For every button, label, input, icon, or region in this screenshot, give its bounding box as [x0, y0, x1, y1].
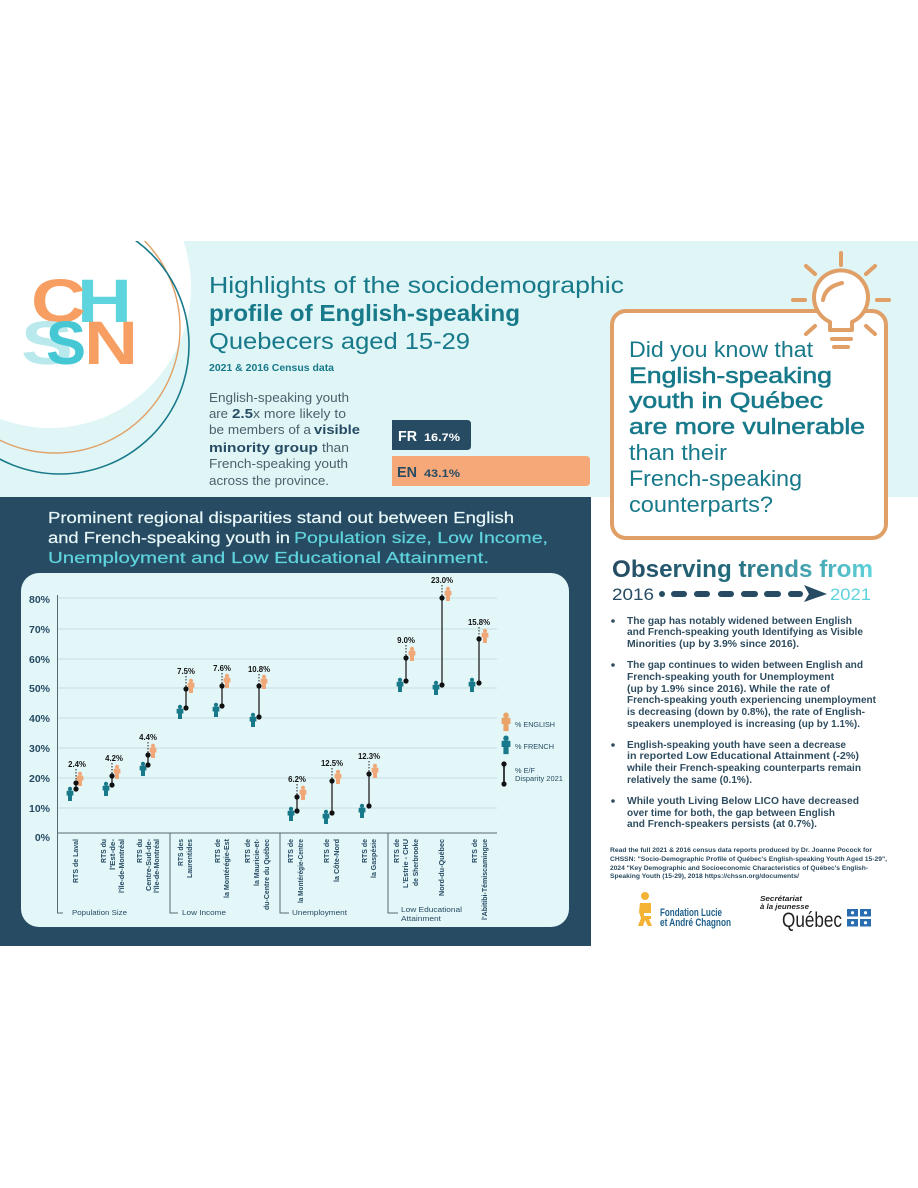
logo: Fondation Lucie et André Chagnon: et André Chagnon	[660, 917, 731, 929]
data: RTS du Centre-Sud-de-l'île-de-Montréal	[135, 733, 161, 893]
data: Nord-du-Québec	[431, 576, 453, 896]
panel heading: Population size, Low Income,	[294, 530, 548, 547]
y axis labels: 20%	[29, 773, 51, 785]
group label: Low Income: Low Income	[182, 908, 226, 917]
bar: EN 43.1%: EN	[397, 465, 417, 481]
y axis labels: 40%	[29, 713, 51, 725]
bar: FR 16.7%: FR	[398, 429, 418, 445]
data: RTS des Laurentides: Laurentides	[185, 839, 194, 878]
legend: % FRENCH	[515, 742, 554, 751]
data: RTS du Centre-Sud-de-l'île-de-Montréal: l'île-de-Montréal	[152, 839, 161, 893]
logo: CHSSN: S	[21, 309, 73, 377]
y axis labels: 50%	[29, 683, 51, 695]
logo: Secrétariat à la jeunesse Québec: à la jeunesse	[760, 902, 809, 911]
chart: disparity dot plot	[21, 573, 569, 927]
y axis labels: 60%	[29, 654, 51, 666]
bullet: unemployment: is decreasing (down by 0.8%), the rate of English-	[627, 707, 865, 718]
group label: Low Educational Attainment: Low Educational	[401, 905, 462, 914]
data: RTS de la Mauricie-et-du-Centre du Québec: RTS de	[243, 839, 252, 863]
bullet: low educational attainment: relatively the same (0.1%).	[627, 775, 752, 786]
title	[209, 272, 624, 354]
heading: observing trends: Observing trends from	[612, 556, 873, 583]
data: RTS des Laurentides: 7.5%	[177, 667, 195, 676]
data: RTS de la Montérégie-Est: RTS de	[213, 839, 222, 863]
header band	[0, 241, 918, 497]
data: RTS de L'Estrie - CHU de Sherbrooke: 9.0%	[397, 636, 415, 645]
y axis labels	[29, 594, 51, 844]
data: RTS de la Mauricie-et-du-Centre du Québec	[243, 665, 271, 910]
callout text: than their	[629, 440, 727, 465]
callout text: youth in Québec	[629, 388, 823, 413]
text block: visible minority: minority group	[209, 441, 318, 455]
data: RTS de l'Abitibi-Témiscamingue: l'Abitibi-Témiscamingue	[480, 839, 489, 920]
bar: EN 43.1%: 43.1%	[424, 468, 460, 480]
bullet: visible minorities	[611, 616, 863, 650]
bullet: low educational attainment: while their French-speaking counterparts remain	[626, 763, 861, 774]
subtitle: census data: 2021 & 2016 Census data	[209, 362, 334, 374]
legend: % E/F	[515, 766, 535, 775]
bullet: visible minorities: The gap has notably widened between English	[627, 616, 852, 627]
bullet: unemployment	[611, 660, 877, 730]
logo: CHSSN	[21, 267, 138, 377]
callout text: Did you know that	[629, 337, 813, 362]
y axis labels: 10%	[29, 803, 51, 815]
y axis labels: 80%	[29, 594, 51, 606]
data: RTS de la Montérégie-Centre: 6.2%	[288, 775, 306, 784]
bullet: unemployment: (up by 1.9% since 2016). While the rate of	[627, 684, 831, 695]
text block: visible minority: are	[209, 407, 228, 421]
data: RTS de la Côte-Nord	[321, 759, 343, 882]
logo: Fondation Lucie et André Chagnon	[638, 892, 731, 929]
callout text	[629, 337, 865, 517]
logo: Fondation Lucie et André Chagnon: Fondation Lucie	[660, 907, 722, 919]
legend: Disparity 2021	[515, 774, 563, 783]
timeline arrow: 2016 to 2021: 2021	[830, 585, 871, 604]
logo: CHSSN: H	[77, 267, 132, 335]
bullet: visible minorities: and French-speaking youth Identifying as Visible	[627, 627, 863, 638]
bullet: living below LICO: While youth Living Below LICO have decreased	[627, 796, 859, 807]
data: RTS du l'Est-de-l'île-de-Montréal: 4.2%	[105, 754, 123, 763]
data: RTS de la Montérégie-Est: la Montérégie-Est	[222, 839, 231, 898]
text block: visible minority: 2.5	[232, 407, 253, 421]
bullet: living below LICO: and French-speakers persists (at 0.7%).	[627, 819, 817, 830]
legend	[501, 713, 563, 787]
footnote: sources: CHSSN: "Socio-Demographic Profile of Québec's English-speaking Youth Aged 15-29",	[610, 856, 887, 863]
callout: did you know	[612, 311, 886, 538]
data: RTS de la Montérégie-Est: 7.6%	[213, 664, 231, 673]
data: RTS des Laurentides	[176, 667, 195, 878]
panel: regional disparities	[0, 497, 591, 946]
data: RTS du l'Est-de-l'île-de-Montréal: l'Est-de-	[108, 838, 117, 870]
legend: % ENGLISH	[515, 720, 555, 729]
text block: visible minority: French-speaking youth	[209, 457, 348, 471]
data: RTS de l'Abitibi-Témiscamingue: 15.8%	[468, 618, 490, 627]
text block: visible minority: across the province.	[209, 474, 329, 488]
data: RTS de la Mauricie-et-du-Centre du Québec: du-Centre du Québec	[262, 839, 271, 910]
text block: visible minority: than	[322, 441, 349, 455]
group label: Population Size: Population Size	[72, 908, 127, 917]
callout text: counterparts?	[629, 492, 773, 517]
infographic page	[0, 241, 918, 946]
data: Nord-du-Québec: 23.0%	[431, 576, 453, 585]
bullet: low educational attainment: in reported Low Educational Attainment (-2%)	[627, 751, 859, 762]
panel heading	[48, 510, 548, 567]
data: RTS des Laurentides: RTS des	[176, 839, 185, 866]
data: RTS du l'Est-de-l'île-de-Montréal	[99, 754, 126, 893]
bullet: unemployment: The gap continues to widen between English and	[627, 660, 863, 671]
text block: visible minority: English-speaking youth	[209, 391, 349, 405]
data: RTS de la Gaspésie: 12.3%	[358, 752, 380, 761]
timeline arrow: 2016 to 2021	[612, 585, 871, 604]
panel heading: and French-speaking youth in	[48, 530, 290, 547]
data: RTS de Laval: RTS de Laval	[71, 839, 80, 883]
data: RTS de l'Abitibi-Témiscamingue: RTS de	[470, 839, 479, 863]
bar: FR 16.7%	[392, 420, 471, 450]
logo: Secrétariat à la jeunesse Québec: Québec	[782, 909, 842, 932]
group label: Low Educational Attainment	[401, 905, 462, 923]
data: RTS du l'Est-de-l'île-de-Montréal: l'île-de-Montréal	[117, 839, 126, 893]
text block: visible minority: x more likely to	[253, 407, 346, 421]
callout text: English-speaking	[629, 363, 832, 388]
text block: visible minority: visible	[314, 423, 360, 437]
data: RTS de la Mauricie-et-du-Centre du Québec: 10.8%	[248, 665, 270, 674]
data: RTS de la Montérégie-Centre	[286, 775, 306, 903]
callout text: French-speaking	[629, 466, 802, 491]
data: RTS du Centre-Sud-de-l'île-de-Montréal: RTS du	[135, 839, 144, 863]
data: RTS de la Côte-Nord: RTS de	[322, 839, 331, 863]
data: RTS du Centre-Sud-de-l'île-de-Montréal: Centre-Sud-de-	[144, 839, 153, 891]
panel heading: Prominent regional disparities stand out between English	[48, 510, 514, 527]
data: RTS du l'Est-de-l'île-de-Montréal: RTS du	[99, 839, 108, 863]
data: RTS de la Montérégie-Centre: RTS de	[286, 839, 295, 863]
data: RTS de la Côte-Nord: 12.5%	[321, 759, 343, 768]
footnote: sources	[610, 847, 887, 880]
data: RTS de la Montérégie-Centre: la Montérégie-Centre	[296, 839, 305, 903]
footnote: sources: Read the full 2021 & 2016 census data reports produced by Dr. Joanne Pocock for	[610, 847, 872, 854]
bar: EN 43.1%	[392, 456, 590, 486]
title: Highlights of the sociodemographic	[209, 272, 624, 298]
data: RTS de la Gaspésie: la Gaspésie	[369, 839, 378, 878]
callout text: are more vulnerable	[629, 414, 865, 439]
bullet: living below LICO: over time for both, the gap between English	[627, 808, 835, 819]
data: RTS de la Gaspésie: RTS de	[360, 839, 369, 863]
timeline arrow: 2016 to 2021: 2016	[612, 585, 654, 604]
data: Nord-du-Québec: Nord-du-Québec	[437, 839, 446, 896]
logo: Secrétariat à la jeunesse Québec	[760, 894, 871, 932]
data: RTS de la Côte-Nord: la Côte-Nord	[332, 839, 341, 882]
data: RTS de L'Estrie - CHU de Sherbrooke: de Sherbrooke	[411, 839, 420, 886]
group label: Low Educational Attainment: Attainment	[401, 914, 442, 923]
data: RTS de la Gaspésie	[358, 752, 380, 878]
data: RTS de l'Abitibi-Témiscamingue	[468, 618, 490, 920]
data: RTS de la Montérégie-Est	[213, 664, 231, 898]
footnote: sources: Speaking Youth (15-29), 2018 https://chssn.org/documents/	[610, 873, 799, 880]
title: profile of English-speaking	[209, 300, 520, 326]
data: RTS de L'Estrie - CHU de Sherbrooke: L'Estrie - CHU	[401, 839, 410, 888]
bullet: unemployment: French-speaking youth for Unemployment	[627, 672, 835, 683]
data: RTS de la Mauricie-et-du-Centre du Québec: la Mauricie-et-	[252, 839, 261, 886]
data: RTS de L'Estrie - CHU de Sherbrooke	[392, 636, 420, 888]
icon: light bulb	[793, 253, 889, 347]
logo: CHSSN: N	[84, 309, 138, 377]
bullet: low educational attainment: English-speaking youth have seen a decrease	[627, 740, 846, 751]
bullet: unemployment: French-speaking youth experiencing unemployment	[627, 695, 877, 706]
logo: CHSSN: S	[46, 309, 86, 377]
y axis labels: 0%	[35, 832, 51, 844]
title: Quebecers aged 15-29	[209, 328, 470, 354]
data: RTS du Centre-Sud-de-l'île-de-Montréal: 4.4%	[139, 733, 157, 742]
bullet: low educational attainment	[611, 740, 861, 786]
data: RTS de Laval	[67, 760, 86, 883]
y axis labels: 70%	[29, 624, 51, 636]
bullet: unemployment: speakers unemployed is increasing (up by 1.1%).	[627, 719, 860, 730]
data: RTS de L'Estrie - CHU de Sherbrooke: RTS de	[392, 839, 401, 863]
data: RTS de Laval: 2.4%	[68, 760, 86, 769]
bar: FR 16.7%: 16.7%	[424, 432, 460, 444]
text block: visible minority	[209, 391, 360, 488]
y axis labels: 30%	[29, 743, 51, 755]
axes and group brackets	[58, 595, 497, 913]
footnote: sources: 2024 "Key Demographic and Socioeconomic Characteristics of Québec's English-	[610, 865, 868, 872]
panel heading: Unemployment and Low Educational Attainment.	[48, 550, 489, 567]
bullet: living below LICO	[611, 796, 859, 830]
logo: Secrétariat à la jeunesse Québec: Secrétariat	[760, 894, 803, 903]
bullet: visible minorities: Minorities (up by 3.9% since 2016).	[627, 639, 799, 650]
logo: CHSSN: C	[31, 267, 86, 335]
group label: Unemployment: Unemployment	[292, 908, 348, 917]
text block: visible minority: be members of a	[209, 423, 311, 437]
